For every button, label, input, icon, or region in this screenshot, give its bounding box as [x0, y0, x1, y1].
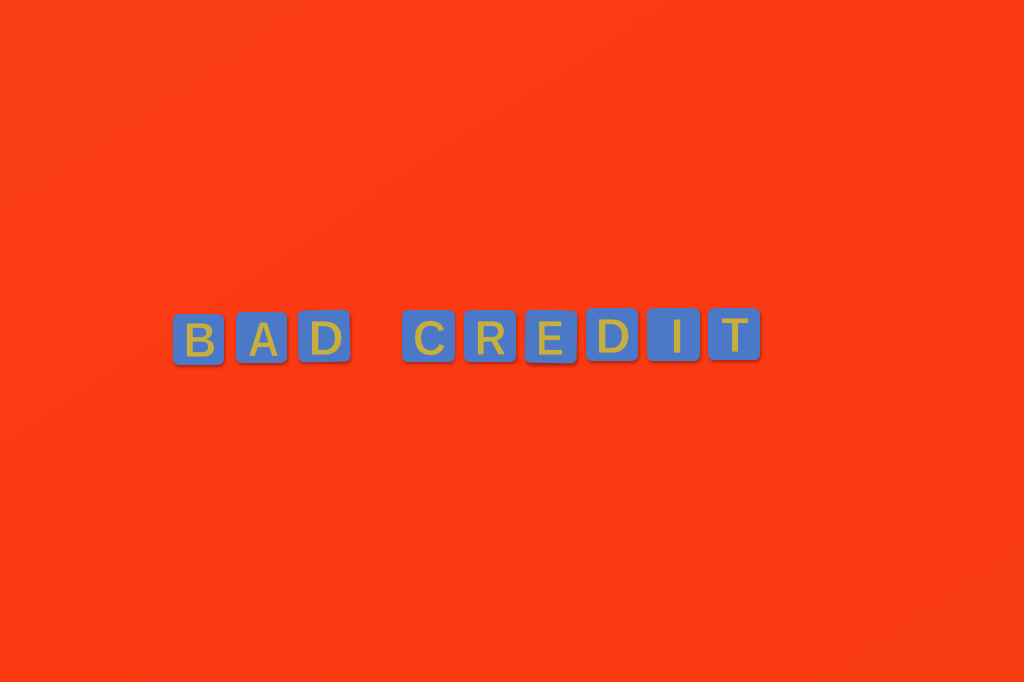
- tile: B: [173, 314, 225, 368]
- tile: E: [525, 310, 578, 366]
- tile: R: [464, 310, 517, 366]
- tile: C: [402, 310, 455, 366]
- tile: D: D: [308, 312, 344, 366]
- word: CREDIT: [402, 308, 761, 366]
- tile: T: T: [721, 309, 749, 363]
- tile: A: [236, 312, 288, 367]
- tile: B: B: [184, 314, 216, 368]
- tile: D: [298, 310, 351, 366]
- tile: T: [708, 308, 761, 363]
- tile: I: I: [670, 310, 684, 364]
- tile: I: [647, 308, 701, 364]
- tile: R: R: [475, 311, 506, 366]
- tile: A: A: [248, 312, 279, 367]
- tile: D: D: [595, 310, 631, 364]
- tile: D: [586, 308, 639, 364]
- tile: E: E: [536, 311, 564, 366]
- paper crease: [450, 260, 610, 310]
- tile: C: C: [413, 312, 446, 366]
- word: BAD: [173, 310, 351, 368]
